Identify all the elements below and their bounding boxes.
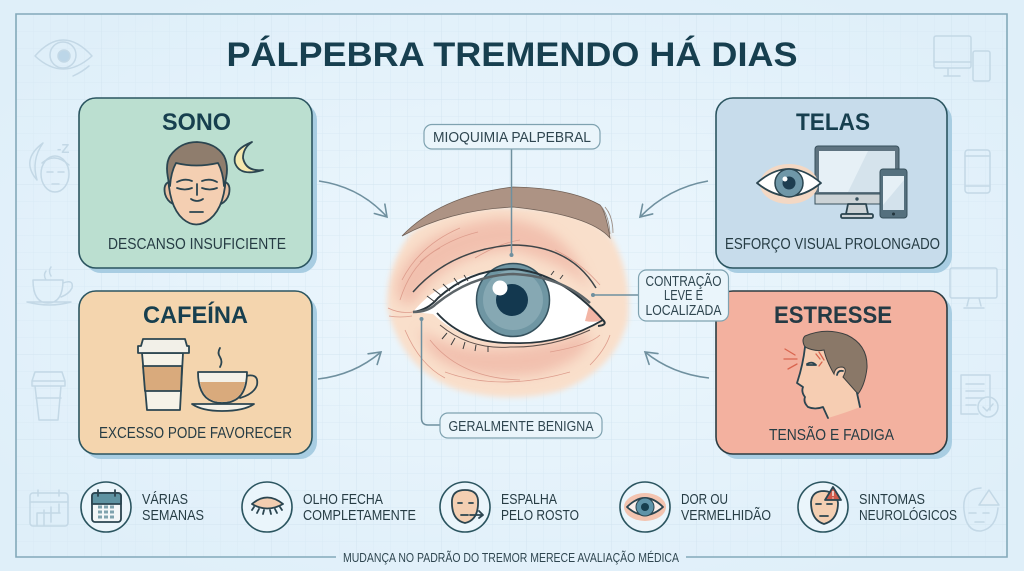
callout: contração leve e localizada xyxy=(591,270,728,321)
text: OLHO FECHA xyxy=(303,491,383,508)
heading: cafeína: CAFEÍNA xyxy=(143,301,248,329)
card: sono xyxy=(79,98,317,273)
background icon: monitor xyxy=(950,268,997,308)
icon: head with alert xyxy=(798,482,848,532)
icon: moon xyxy=(235,142,263,172)
icon: calendar xyxy=(81,482,131,532)
background icon: calendar xyxy=(30,490,68,526)
background icon: document check xyxy=(961,375,998,417)
background icon: coffee cup xyxy=(27,267,72,305)
warning: olho fecha completamente: COMPLETAMENTE xyxy=(303,507,416,524)
card: cafeína xyxy=(79,291,317,459)
arrow: sono to eye xyxy=(319,181,387,217)
heading: telas: TELAS xyxy=(796,109,870,136)
icon: red eye xyxy=(620,482,670,532)
text: DOR OU xyxy=(681,491,728,508)
warning: dor ou vermelhidão: VERMELHIDÃO xyxy=(681,507,771,524)
background icon: sleeping face xyxy=(30,141,69,192)
background icon: phone xyxy=(965,150,990,193)
text: VÁRIAS xyxy=(142,491,188,508)
wrinkles xyxy=(388,228,610,382)
arrow: cafeína to eye xyxy=(318,352,381,379)
icon: closed eye xyxy=(242,482,292,532)
warning: sintomas neurológicos xyxy=(798,482,957,532)
callout: mioquimia palpebral: MIOQUIMIA PALPEBRAL xyxy=(433,130,591,146)
icon: stressed head xyxy=(784,331,867,418)
sclera xyxy=(413,269,603,343)
heading: estresse: ESTRESSE xyxy=(774,302,892,329)
callout: geralmente benigna xyxy=(420,317,602,438)
skin xyxy=(387,207,629,397)
warning: espalha pelo rosto xyxy=(440,482,579,532)
card: estresse xyxy=(716,291,952,459)
icon: monitor xyxy=(815,146,899,218)
iris xyxy=(476,264,550,336)
icon: takeaway cup xyxy=(138,339,189,410)
label: descanso insuficiente: DESCANSO INSUFICIENTE xyxy=(108,236,286,253)
callout: contração leve e localizada: CONTRAÇÃO xyxy=(646,273,722,290)
background icon: takeaway cup xyxy=(32,372,65,420)
card: telas xyxy=(716,98,952,273)
eyelids xyxy=(413,269,605,326)
icon: phone xyxy=(880,169,907,218)
warning: dor ou vermelhidão xyxy=(620,482,771,532)
icon: coffee cup xyxy=(192,348,257,411)
icon: eye xyxy=(757,164,821,204)
warning: espalha pelo rosto: PELO ROSTO xyxy=(501,507,579,524)
callout: geralmente benigna: GERALMENTE BENIGNA xyxy=(448,419,594,435)
warning: olho fecha completamente xyxy=(242,482,416,532)
callout: contração leve e localizada: LOCALIZADA xyxy=(646,303,722,319)
background icon: sleeping face: -Z xyxy=(57,141,69,156)
lashes xyxy=(427,271,563,352)
icon: sleeping face xyxy=(164,142,230,224)
background icon: face warning xyxy=(964,488,999,531)
label: esforço visual: ESFORÇO VISUAL PROLONGADO xyxy=(725,236,940,253)
text: ESPALHA xyxy=(501,491,557,508)
warning: sintomas neurológicos: NEUROLÓGICOS xyxy=(859,507,957,524)
callout: mioquimia palpebral xyxy=(424,124,600,257)
eyebrow xyxy=(402,187,610,238)
callout: contração leve e localizada: LEVE E xyxy=(664,288,703,304)
arrow: telas to eye xyxy=(640,181,708,217)
label: excesso: EXCESSO PODE FAVORECER xyxy=(99,425,292,442)
arrow: estresse to eye xyxy=(645,352,709,378)
background icon: eye xyxy=(35,40,92,76)
background icon: devices xyxy=(934,36,990,81)
text: SINTOMAS xyxy=(859,491,925,508)
warning: várias semanas xyxy=(81,482,204,532)
central eye illustration xyxy=(387,187,629,397)
icon: face with arrow xyxy=(440,482,490,532)
warning: várias semanas: SEMANAS xyxy=(142,507,204,524)
label: tensão e fadiga: TENSÃO E FADIGA xyxy=(769,424,894,444)
heading: sono: SONO xyxy=(162,109,231,136)
footer note: MUDANÇA NO PADRÃO DO TREMOR MERECE AVALIAÇÃO MÉDICA xyxy=(343,550,679,565)
title: PÁLPEBRA TREMENDO HÁ DIAS xyxy=(226,36,798,74)
